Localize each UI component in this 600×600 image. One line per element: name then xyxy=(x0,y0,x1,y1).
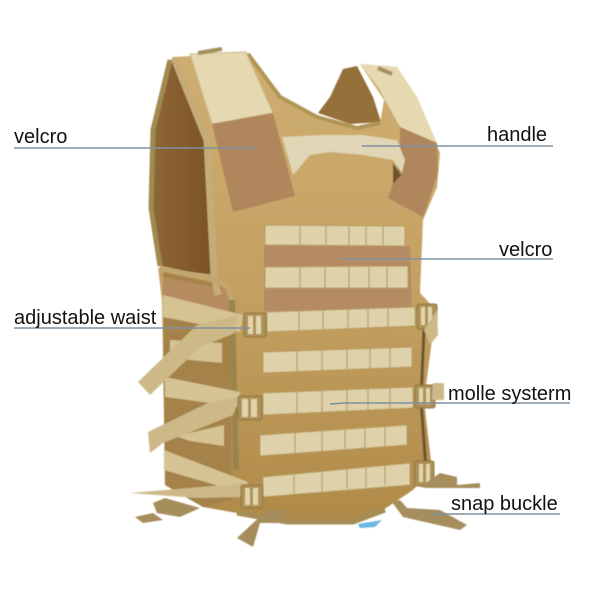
side panel xyxy=(163,272,232,507)
velcro panel right xyxy=(388,127,438,217)
side velcro xyxy=(163,277,230,316)
label: snap buckle: snap buckle xyxy=(451,493,558,515)
vest body xyxy=(158,53,440,522)
side strips left xyxy=(163,295,248,492)
shoulder rings xyxy=(198,49,392,74)
near armhole interior xyxy=(150,60,214,275)
hanging straps xyxy=(130,315,248,498)
velcro panel left xyxy=(212,113,295,212)
far armhole interior xyxy=(318,66,381,124)
near armhole binding xyxy=(151,60,170,266)
vest illustration xyxy=(130,49,480,547)
strip stitching xyxy=(294,225,390,494)
right strap ends xyxy=(424,310,444,400)
shoulder patch right xyxy=(360,64,437,143)
molle strips xyxy=(260,225,415,497)
label: velcro right: velcro xyxy=(499,239,552,261)
snap tabs xyxy=(135,473,480,547)
blue hint under vest xyxy=(358,520,382,528)
label: velcro left: velcro xyxy=(14,126,67,148)
seam binding xyxy=(174,58,218,295)
handle xyxy=(282,135,405,175)
label: handle: handle xyxy=(487,124,547,146)
velcro bands xyxy=(264,245,412,311)
label: adjustable waist: adjustable waist xyxy=(14,307,157,329)
label: molle systerm: molle systerm xyxy=(448,383,571,405)
leader lines xyxy=(14,146,570,514)
buckle bars xyxy=(242,307,432,505)
buckles xyxy=(238,304,437,508)
shoulder patch left xyxy=(190,52,273,124)
